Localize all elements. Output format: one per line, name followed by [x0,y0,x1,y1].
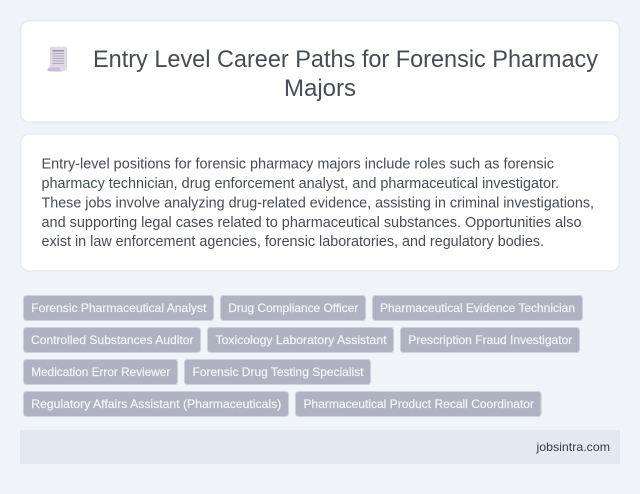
tag: Toxicology Laboratory Assistant [208,328,394,352]
tag: Toxicology Laboratory Assistant: Toxicology Laboratory Assistant [216,333,387,347]
description text [42,156,594,250]
title [93,46,598,102]
description text: exist in law enforcement agencies, forensic laboratories, and regulatory bodies. [42,234,544,250]
tag: Regulatory Affairs Assistant (Pharmaceuticals): Regulatory Affairs Assistant (Pharmaceuticals) [31,397,281,411]
tag: Regulatory Affairs Assistant (Pharmaceuticals) [24,392,288,416]
tags: career paths [24,296,582,416]
tag: Pharmaceutical Product Recall Coordinator [296,392,541,416]
tag: Forensic Drug Testing Specialist [184,360,370,384]
description text: and supporting legal cases related to pharmaceutical substances. Opportunities also [42,215,582,231]
tag: Pharmaceutical Evidence Technician: Pharmaceutical Evidence Technician [380,301,575,315]
tag: Controlled Substances Auditor [24,328,200,352]
tag: Prescription Fraud Investigator: Prescription Fraud Investigator [408,333,572,347]
tag: Medication Error Reviewer [24,360,178,384]
title: Entry Level Career Paths for Forensic Pharmacy [93,46,598,73]
header panel [21,21,619,122]
footer bar [20,430,620,464]
tag: Prescription Fraud Investigator [400,328,580,352]
tag: Drug Compliance Officer: Drug Compliance Officer [228,301,358,315]
description text: Entry-level positions for forensic pharmacy majors include roles such as forensic [42,156,554,172]
tag: Forensic Pharmaceutical Analyst [24,296,214,320]
description text: These jobs involve analyzing drug-related evidence, assisting in criminal investigations, [42,195,594,211]
tag: Forensic Pharmaceutical Analyst: Forensic Pharmaceutical Analyst [31,301,207,315]
tag: Drug Compliance Officer [220,296,366,320]
title: Majors [284,75,356,102]
footer text: jobsintra.com: jobsintra.com [535,440,610,454]
description text: pharmacy technician, drug enforcement analyst, and pharmaceutical investigator. [42,176,559,192]
tag: Forensic Drug Testing Specialist: Forensic Drug Testing Specialist [192,365,364,379]
icon: prescription scroll [48,46,67,72]
tag: Controlled Substances Auditor: Controlled Substances Auditor [31,333,194,347]
tag: Medication Error Reviewer: Medication Error Reviewer [31,365,170,379]
tag: Pharmaceutical Product Recall Coordinator: Pharmaceutical Product Recall Coordinator [304,397,534,411]
description panel [21,134,619,271]
tag: Pharmaceutical Evidence Technician [372,296,582,320]
